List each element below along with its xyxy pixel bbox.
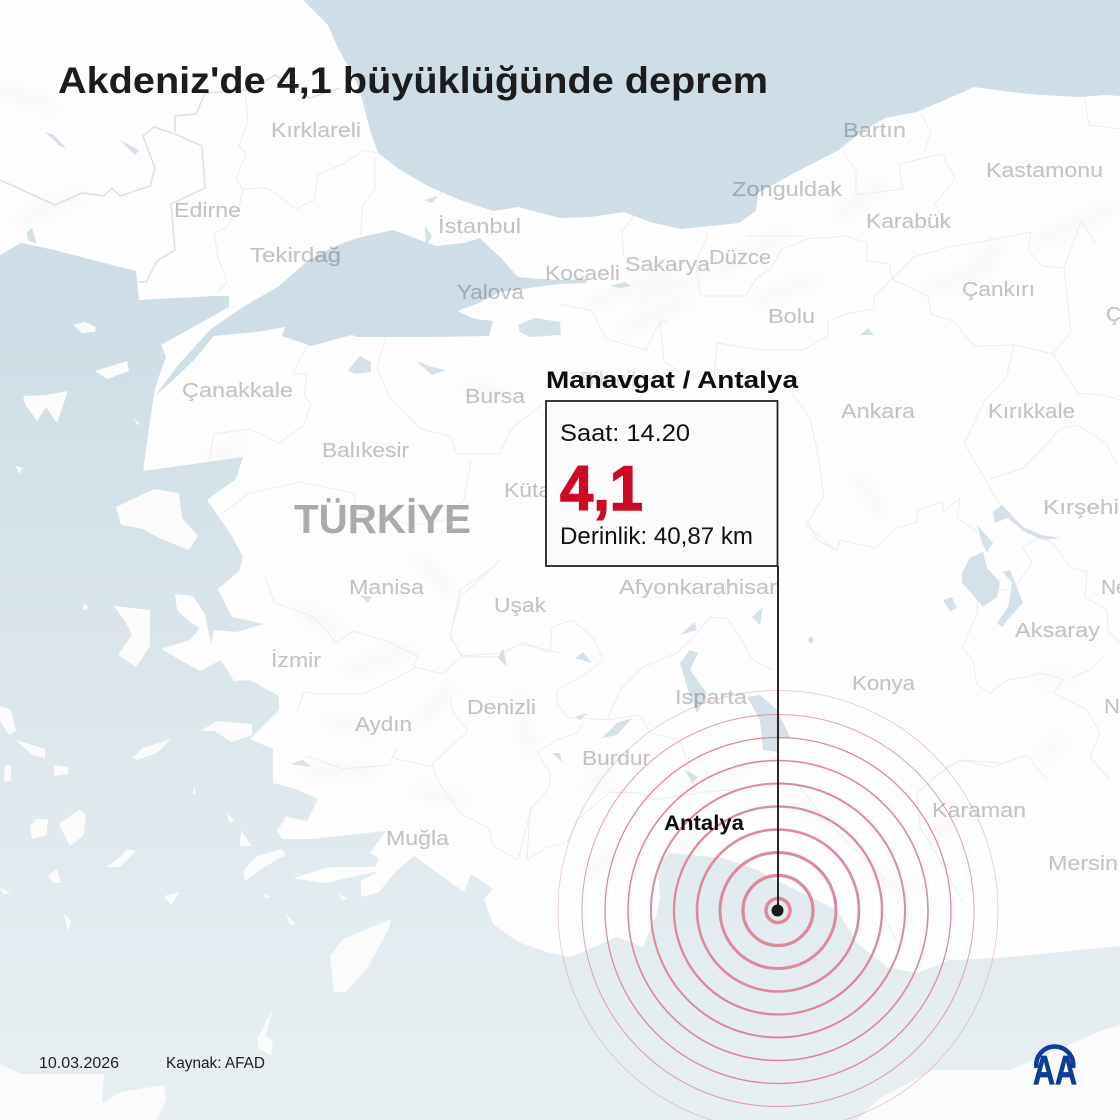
map: province labels: Karabük <box>866 211 952 233</box>
magnitude: 4,1 <box>560 454 643 524</box>
earthquake rings <box>558 690 998 1120</box>
map: province labels: Çankırı <box>962 279 1035 301</box>
map: province labels: Aydın <box>355 714 412 736</box>
map: terrain hillshade <box>0 90 1110 890</box>
map: province labels: İstanbul <box>438 215 521 238</box>
map: province labels: Konya <box>852 673 916 695</box>
title: Akdeniz'de 4,1 büyüklüğünde deprem <box>58 60 768 101</box>
map: province labels: Kırşehir <box>1043 497 1120 519</box>
map: province labels: Aksaray <box>1015 620 1100 642</box>
city label: Antalya: Antalya <box>664 812 744 835</box>
map: province labels: Çanakkale <box>182 380 293 402</box>
map: province labels: Yalova <box>457 282 525 304</box>
map: province labels: Zonguldak <box>732 179 843 201</box>
source: Kaynak: AFAD <box>166 1055 265 1072</box>
map: province labels: Balıkesir <box>322 440 409 462</box>
map: province labels: Bartın <box>843 120 906 142</box>
map: province labels: Kastamonu <box>986 160 1103 182</box>
time: Saat: 14.20 <box>560 420 690 447</box>
map: province labels: Kütahya <box>504 480 589 502</box>
map: province labels <box>174 120 1120 875</box>
map: province labels: Tekirdağ <box>250 245 341 267</box>
map: province labels: Afyonkarahisar <box>619 577 777 599</box>
depth: Derinlik: 40,87 km <box>560 523 753 550</box>
map: province labels: Karaman <box>932 800 1026 822</box>
map: province labels: Muğla <box>386 828 450 850</box>
map: province labels: Denizli <box>467 697 536 719</box>
callout panel <box>546 401 778 566</box>
map: province labels: İzmir <box>271 649 321 672</box>
map: province labels: Uşak <box>494 595 547 617</box>
map: province labels: Sakarya <box>625 254 711 276</box>
map: Aegean islands and Cyprus <box>0 322 1120 1120</box>
map: province labels: Ankara <box>841 401 916 423</box>
icon: Anadolu Agency logo: AA <box>1033 1047 1077 1093</box>
map: province labels: Kırıkkale <box>988 401 1075 423</box>
panel box <box>546 401 778 566</box>
map: province and country borders <box>0 75 1120 943</box>
map: province labels: Burdur <box>582 748 650 770</box>
map: province labels: Bursa <box>465 386 526 408</box>
map: province labels: Manisa <box>349 577 425 599</box>
country label: Türkiye: TÜRKİYE <box>294 496 471 542</box>
Black Sea <box>303 0 1120 229</box>
map: province labels: Kocaeli <box>545 263 620 285</box>
map: province labels: Isparta <box>675 687 748 709</box>
callout: location heading: Manavgat / Antalya <box>546 367 799 394</box>
map: province labels: Mersin <box>1048 853 1118 875</box>
map: province labels: Kırklareli <box>271 120 361 142</box>
date: 10.03.2026 <box>39 1055 119 1072</box>
Marmara Sea <box>155 230 587 396</box>
Aegean and Mediterranean <box>0 243 1120 1120</box>
map: province labels: Düzce <box>709 247 771 269</box>
epicentre dot <box>772 904 784 916</box>
callout leader line <box>777 566 779 910</box>
map: province labels: Bilecik <box>580 369 643 391</box>
map: lakes <box>27 132 1060 783</box>
map: province labels: Bolu <box>768 306 815 328</box>
map: province labels: Edirne <box>174 200 241 222</box>
